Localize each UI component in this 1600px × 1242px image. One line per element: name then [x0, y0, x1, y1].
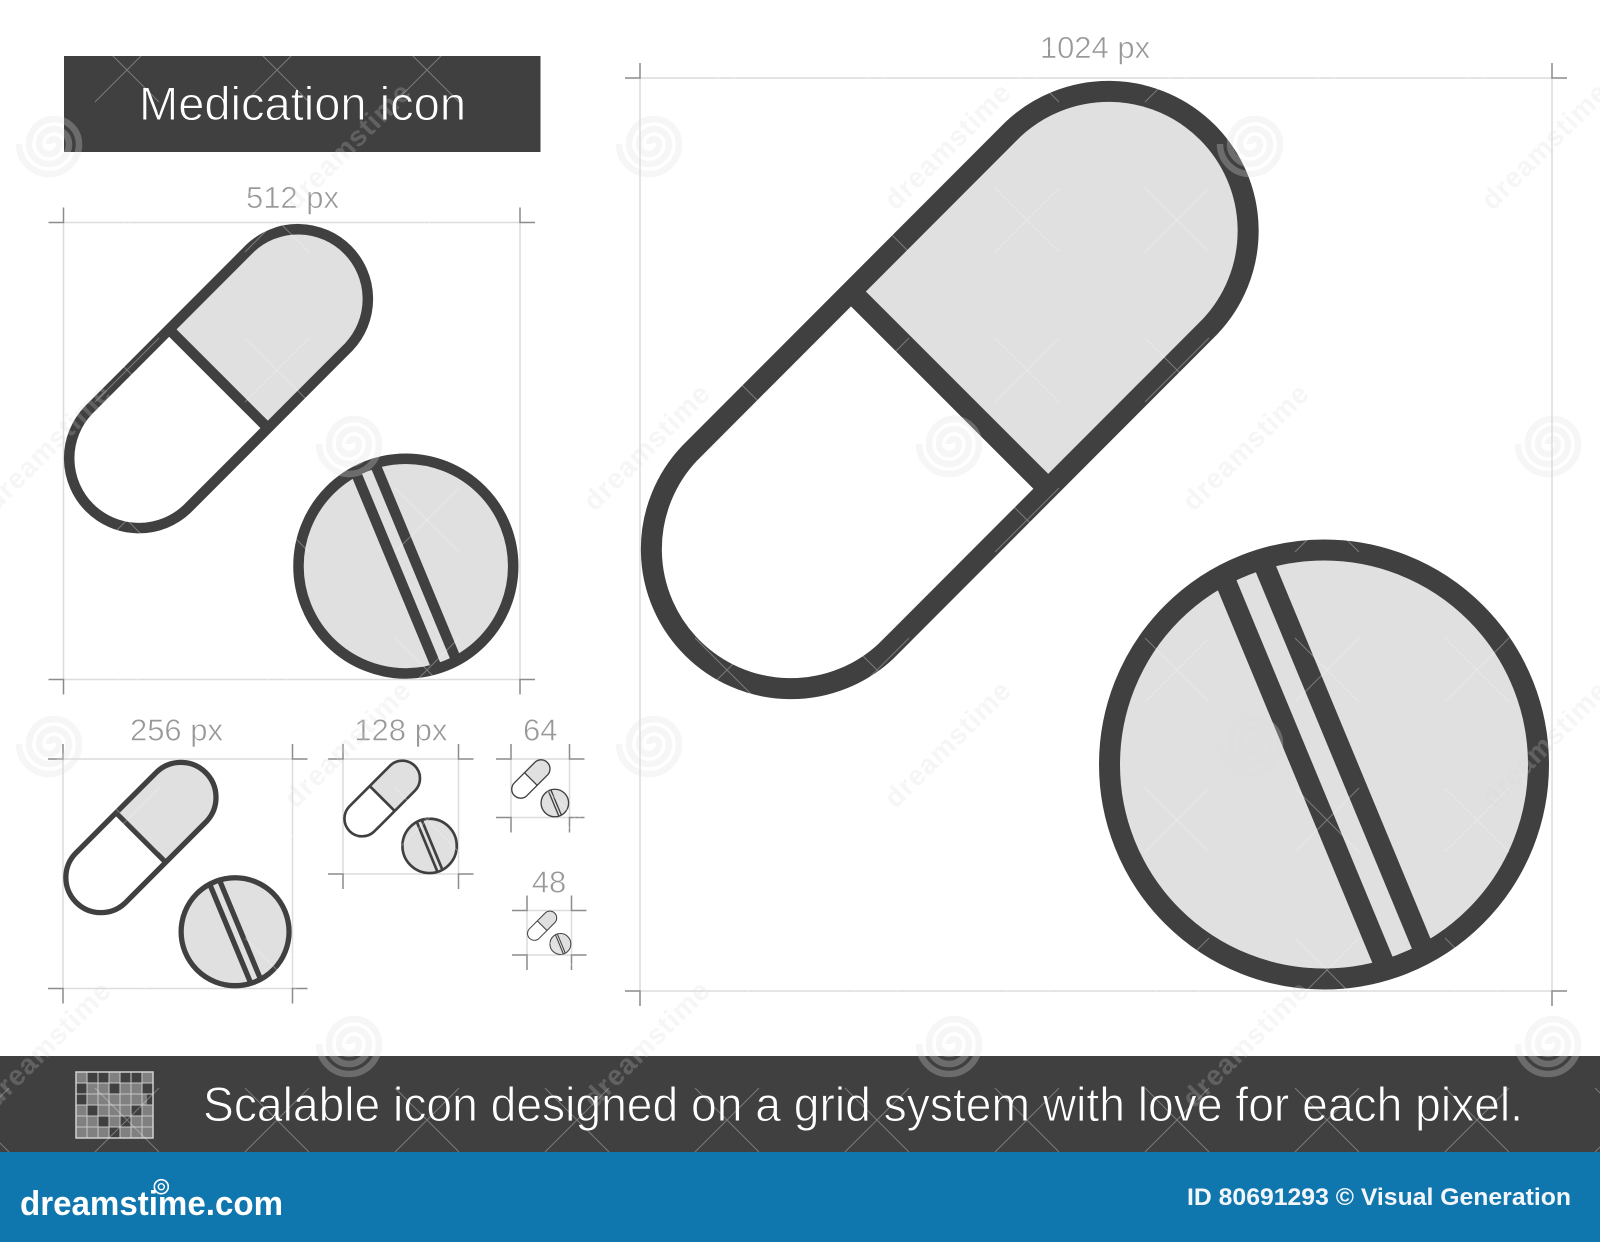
size label: 64: 64 [523, 713, 558, 748]
size label: 48: 48 [532, 865, 566, 900]
size label: 1024 px: 1024 px [1040, 30, 1151, 65]
title banner [64, 56, 540, 152]
stock watermark: spirals [19, 119, 1578, 1074]
round tablet with score line [1110, 550, 1538, 979]
icon: pixel grid [76, 1072, 153, 1138]
panel: 128 px preview [328, 713, 474, 889]
stock watermark: diagonal wordmarks: dreamstime [1176, 378, 1315, 517]
icon: medication 512 px [69, 229, 513, 673]
icon: medication 64 px [512, 760, 569, 817]
footer message text: Scalable icon designed on a grid system with love for each pixel. [203, 1079, 1523, 1132]
icon: medication 128 px [344, 761, 457, 873]
footer band: grid system message [0, 1056, 1600, 1152]
panel: 1024 px preview [625, 30, 1567, 1006]
capsule [651, 91, 1248, 689]
logo: dreamstime.com: dreamstime.com [20, 1185, 283, 1223]
icon: medication 1024 px [651, 91, 1538, 979]
icon: medication 256 px [66, 762, 289, 986]
stock watermark: diagonal wordmarks: dreamstime [878, 77, 1017, 216]
credit bar [0, 1152, 1600, 1242]
stock watermark: diagonal wordmarks: dreamstime [278, 77, 417, 216]
panel: 64 px preview [496, 713, 584, 832]
stock watermark: diagonal wordmarks: dreamstime [878, 675, 1017, 814]
stock watermark: diagonal wordmarks: dreamstime [1176, 975, 1315, 1114]
size label: 128 px: 128 px [354, 713, 448, 748]
size label: 256 px: 256 px [130, 713, 224, 748]
image id and author credit: ID 80691293 © Visual Generation [1187, 1184, 1571, 1211]
icon: medication 48 px [528, 911, 571, 954]
panel: 48 px preview [512, 865, 586, 970]
size label: 512 px: 512 px [246, 180, 340, 215]
panel: 256 px preview [48, 713, 308, 1004]
title banner: Medication icon [139, 77, 466, 130]
stock watermark: diagonal wordmarks: dreamstime [577, 975, 716, 1114]
panel: 512 px preview [48, 180, 535, 694]
stock watermark: diagonal wordmarks: dreamstime [278, 675, 417, 814]
stock watermark: diagonal wordmarks: dreamstime [577, 378, 716, 517]
